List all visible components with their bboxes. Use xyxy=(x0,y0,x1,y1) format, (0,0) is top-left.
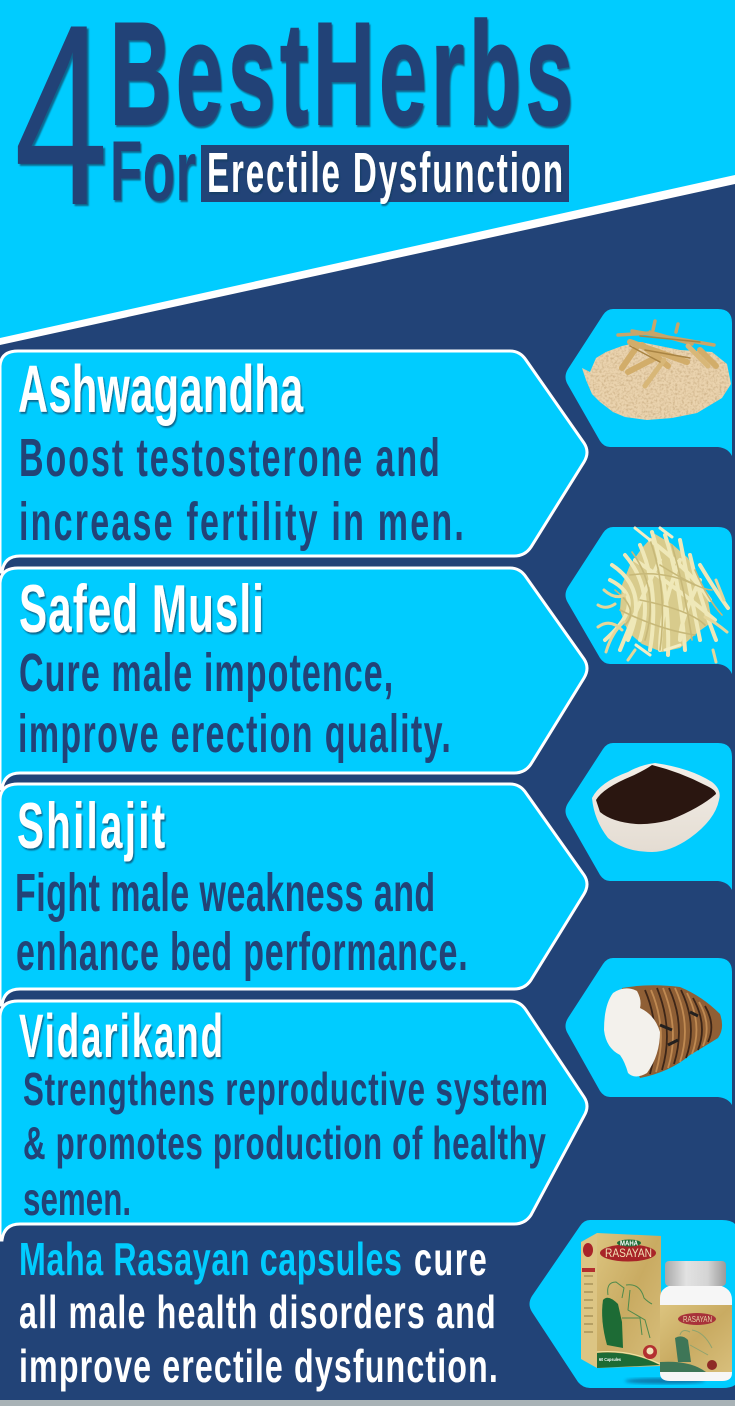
panel: Shilajit xyxy=(0,784,587,1005)
card shape xyxy=(0,1001,587,1240)
product box xyxy=(581,1233,661,1368)
tile xyxy=(566,743,732,890)
herb name: Shilajit xyxy=(17,790,165,862)
call to action text: improve erectile dysfunction. xyxy=(19,1341,498,1392)
box footer xyxy=(597,1352,660,1368)
heading: For: For xyxy=(110,123,196,218)
description: Cure male impotence, xyxy=(19,642,393,703)
call to action text: all male health disorders and xyxy=(19,1287,496,1338)
product box: RASAYAN xyxy=(605,1246,652,1260)
tile xyxy=(530,1220,735,1388)
herb tile: shilajit xyxy=(566,743,732,890)
tile xyxy=(566,958,732,1105)
description: Fight male weakness and xyxy=(15,862,435,923)
panel: Safed Musli xyxy=(0,568,587,789)
bottom grey strip xyxy=(0,1400,735,1406)
card shape xyxy=(0,784,587,1005)
description: semen. xyxy=(23,1174,131,1226)
subtitle box xyxy=(201,145,569,202)
icon: root sticks xyxy=(618,321,716,386)
icon: bowl xyxy=(592,763,720,852)
description xyxy=(23,1064,548,1226)
description: Strengthens reproductive system xyxy=(23,1064,548,1116)
icon: tuber bark texture xyxy=(645,988,711,1074)
subtitle text: Erectile Dysfunction xyxy=(207,141,563,204)
description: Boost testosterone and xyxy=(19,427,440,488)
description: enhance bed performance. xyxy=(16,921,468,982)
diagonal stripe xyxy=(0,175,735,345)
description: & promotes production of healthy xyxy=(23,1118,546,1170)
herb tile: safed musli xyxy=(566,527,732,674)
description: increase fertility in men. xyxy=(19,491,464,552)
panel: Vidarikand xyxy=(0,1001,587,1240)
description xyxy=(18,642,451,764)
tile xyxy=(566,527,732,674)
card shape xyxy=(0,351,587,572)
herb tile: vidarikand xyxy=(566,958,732,1105)
icon: powder pile xyxy=(582,342,731,420)
herb name: Ashwagandha xyxy=(18,352,304,426)
tile xyxy=(566,309,732,456)
herb name: Vidarikand xyxy=(19,1001,223,1070)
icon: dark powder xyxy=(596,765,716,824)
product bottle: RASAYAN xyxy=(683,1315,712,1324)
description xyxy=(15,862,468,982)
product box: MAHA xyxy=(620,1240,638,1248)
icon: shredded root pile xyxy=(598,528,728,662)
herb name: Safed Musli xyxy=(19,571,264,646)
description: improve erection quality. xyxy=(18,703,451,764)
product bottle xyxy=(625,1261,732,1384)
herb tile: ashwagandha xyxy=(566,309,732,456)
product tile xyxy=(530,1220,735,1388)
call to action text: Maha Rasayan capsules xyxy=(19,1234,402,1285)
card shape xyxy=(0,568,587,789)
title xyxy=(14,0,573,259)
box logo xyxy=(600,1244,656,1262)
header background xyxy=(0,0,735,360)
description xyxy=(19,427,464,552)
icon: tuber body xyxy=(622,985,722,1078)
box couple silhouette xyxy=(602,1298,623,1348)
call to action text: cure xyxy=(414,1234,487,1285)
product box: 60 Capsules xyxy=(599,1357,621,1362)
panel: Ashwagandha xyxy=(0,351,587,572)
call to action text xyxy=(19,1234,498,1392)
icon: white cut face xyxy=(604,988,660,1076)
